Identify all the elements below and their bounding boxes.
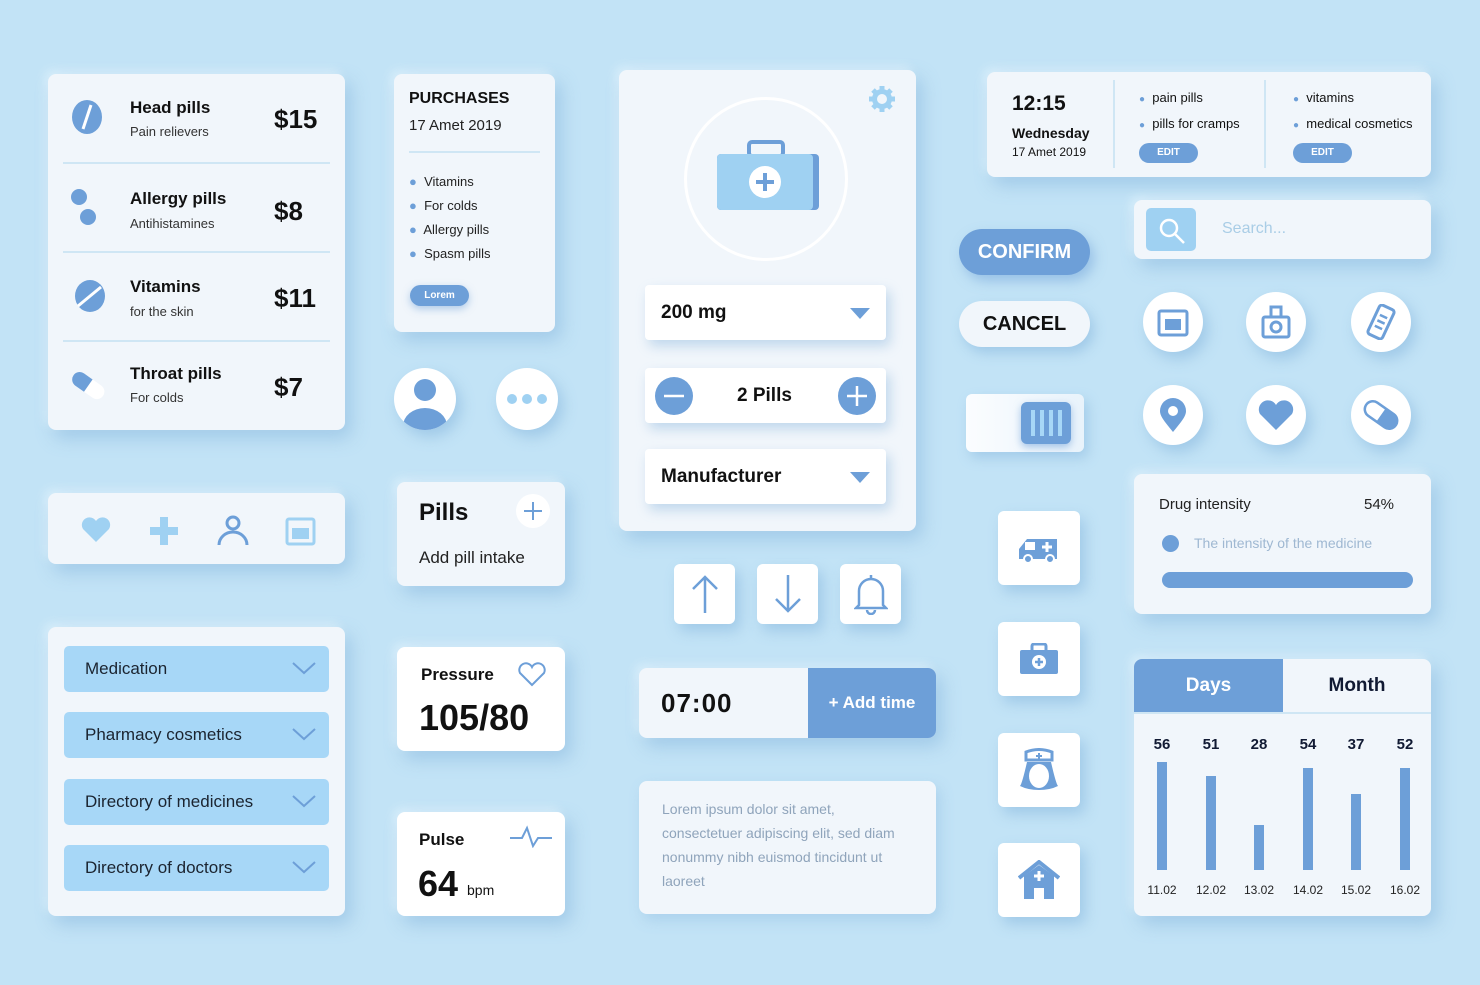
panel: pulse xyxy=(397,812,565,916)
panel: dosage selector xyxy=(619,70,916,531)
icon: medical case xyxy=(998,622,1080,696)
icon: plus xyxy=(516,494,550,528)
panel: schedule header: 17 Amet 2019 xyxy=(1012,145,1086,159)
dropdown: manufacturer: Manufacturer xyxy=(661,466,781,487)
panel: time picker: 07:00 xyxy=(661,688,732,718)
item: head pills xyxy=(72,98,317,139)
item: head pills: Head pills xyxy=(130,98,210,117)
panel: schedule header xyxy=(987,72,1431,177)
icon: hospital xyxy=(998,843,1080,917)
icon: more dots xyxy=(496,368,558,430)
item: vitamins: for the skin xyxy=(130,304,194,319)
icon: avatar xyxy=(394,368,456,430)
text block: lorem ipsum: consectetuer adipiscing elit, sed diam xyxy=(662,825,895,841)
search bar: Search... xyxy=(1222,220,1286,237)
button: confirm xyxy=(959,229,1090,275)
list: ● Vitamins xyxy=(409,174,474,189)
text block: lorem ipsum: nonummy nibh euismod tincidunt ut xyxy=(662,849,882,865)
button: edit: EDIT xyxy=(1157,147,1180,158)
text block: lorem ipsum xyxy=(639,781,936,914)
item: medication xyxy=(64,646,329,692)
panel: schedule header: 12:15 xyxy=(1012,92,1066,115)
icon: heart xyxy=(1246,385,1306,445)
item: allergy pills xyxy=(71,189,303,231)
panel: schedule header: Wednesday xyxy=(1012,125,1090,141)
dropdown: 200 mg xyxy=(645,285,886,340)
bars: 28 xyxy=(1251,736,1267,753)
item: throat pills xyxy=(72,364,303,405)
tab: days xyxy=(1134,659,1283,712)
bars: 56 xyxy=(1154,736,1170,753)
panel: add pill intake xyxy=(397,482,565,586)
bars: 15.02 xyxy=(1341,883,1371,897)
button: edit 2 xyxy=(1293,143,1352,163)
icon: nurse xyxy=(998,733,1080,807)
stepper: 2 pills xyxy=(645,368,886,423)
item: vitamins: $11 xyxy=(274,283,316,313)
button: bell xyxy=(840,564,901,624)
panel: schedule header: ● pain pills xyxy=(1139,90,1203,105)
bars xyxy=(1147,736,1420,897)
panel: purchases xyxy=(394,74,555,332)
bars: 54 xyxy=(1300,736,1317,753)
panel: add pill intake: Pills xyxy=(419,499,468,526)
icon: capsule xyxy=(1351,385,1411,445)
button: edit xyxy=(1139,143,1198,163)
panel: drug intensity: 54% xyxy=(1364,496,1394,513)
panel: schedule header: ● medical cosmetics xyxy=(1293,116,1412,131)
button: add time xyxy=(808,668,936,738)
panel: drug intensity: The intensity of the medicine xyxy=(1194,535,1372,551)
stepper: 2 pills: 2 Pills xyxy=(737,385,792,406)
panel: pill price list xyxy=(48,74,345,430)
panel: add pill intake: Add pill intake xyxy=(419,548,525,567)
icon: scale xyxy=(1246,292,1306,352)
panel: pressure xyxy=(397,647,565,751)
bars: 52 xyxy=(1397,736,1413,753)
panel: drug intensity: Drug intensity xyxy=(1159,496,1251,513)
panel: pulse: bpm xyxy=(467,882,494,898)
button: cancel: CANCEL xyxy=(983,313,1066,335)
panel: bar chart days/month xyxy=(1134,659,1431,916)
icon: first aid kit in circle xyxy=(684,97,848,261)
panel: schedule header: ● pills for cramps xyxy=(1139,116,1240,131)
dropdown: 200 mg: 200 mg xyxy=(661,302,726,323)
text block: lorem ipsum: laoreet xyxy=(662,873,705,889)
bars: 14.02 xyxy=(1293,883,1323,897)
icon: location pin xyxy=(1143,385,1203,445)
icon: calendar xyxy=(1143,292,1203,352)
bars: 11.02 xyxy=(1147,883,1177,897)
item: vitamins: Vitamins xyxy=(130,277,201,296)
item: allergy pills: Antihistamines xyxy=(130,216,215,231)
item: directory of doctors xyxy=(64,845,329,891)
button: edit 2: EDIT xyxy=(1311,147,1334,158)
item: medication: Medication xyxy=(85,659,167,678)
button: add time: + Add time xyxy=(829,693,915,712)
text block: lorem ipsum: Lorem ipsum dolor sit amet, xyxy=(662,801,835,817)
dropdown: manufacturer xyxy=(645,449,886,504)
tab: month: Month xyxy=(1328,675,1385,696)
bars: 13.02 xyxy=(1244,883,1274,897)
tab: days: Days xyxy=(1186,675,1231,696)
list xyxy=(409,174,491,261)
panel: dropdown menu list xyxy=(48,627,345,916)
item: throat pills: $7 xyxy=(274,372,303,402)
button: arrow down xyxy=(757,564,818,624)
panel: nav bar xyxy=(48,493,345,564)
item: throat pills: For colds xyxy=(130,390,183,405)
bars: 12.02 xyxy=(1196,883,1226,897)
item: head pills: $15 xyxy=(274,104,317,134)
item: throat pills: Throat pills xyxy=(130,364,222,383)
item: allergy pills: $8 xyxy=(274,196,303,226)
item: vitamins xyxy=(75,277,316,319)
search bar xyxy=(1134,200,1431,259)
button: confirm: CONFIRM xyxy=(978,241,1071,263)
item: pharmacy cosmetics xyxy=(64,712,329,758)
icon: pill bottle xyxy=(1351,292,1411,352)
button: arrow up xyxy=(674,564,735,624)
panel: purchases: 17 Amet 2019 xyxy=(409,117,502,134)
panel: pulse: 64 xyxy=(418,863,458,904)
list: ● Spasm pills xyxy=(409,246,491,261)
panel: schedule header: ● vitamins xyxy=(1293,90,1354,105)
panel: pulse: Pulse xyxy=(419,830,464,849)
icon: ambulance xyxy=(998,511,1080,585)
panel: pressure: 105/80 xyxy=(419,697,529,738)
list: ● Allergy pills xyxy=(409,222,489,237)
panel: pressure: Pressure xyxy=(421,665,494,684)
button: lorem xyxy=(410,285,469,306)
icon: gear xyxy=(869,86,895,112)
item: pharmacy cosmetics: Pharmacy cosmetics xyxy=(85,725,242,744)
list: ● For colds xyxy=(409,198,478,213)
item: directory of doctors: Directory of doctors xyxy=(85,858,232,877)
item: directory of medicines xyxy=(64,779,329,825)
toggle switch xyxy=(966,394,1084,452)
item: directory of medicines: Directory of medicines xyxy=(85,792,253,811)
panel: drug intensity xyxy=(1134,474,1431,614)
panel: time picker xyxy=(639,668,936,738)
progress bar xyxy=(1162,572,1413,588)
bars: 51 xyxy=(1203,736,1219,753)
bars: 16.02 xyxy=(1390,883,1420,897)
button: cancel xyxy=(959,301,1090,347)
button: lorem: Lorem xyxy=(424,290,455,301)
item: allergy pills: Allergy pills xyxy=(130,189,226,208)
panel: purchases: PURCHASES xyxy=(409,90,509,107)
bars: 37 xyxy=(1348,736,1364,753)
item: head pills: Pain relievers xyxy=(130,124,209,139)
